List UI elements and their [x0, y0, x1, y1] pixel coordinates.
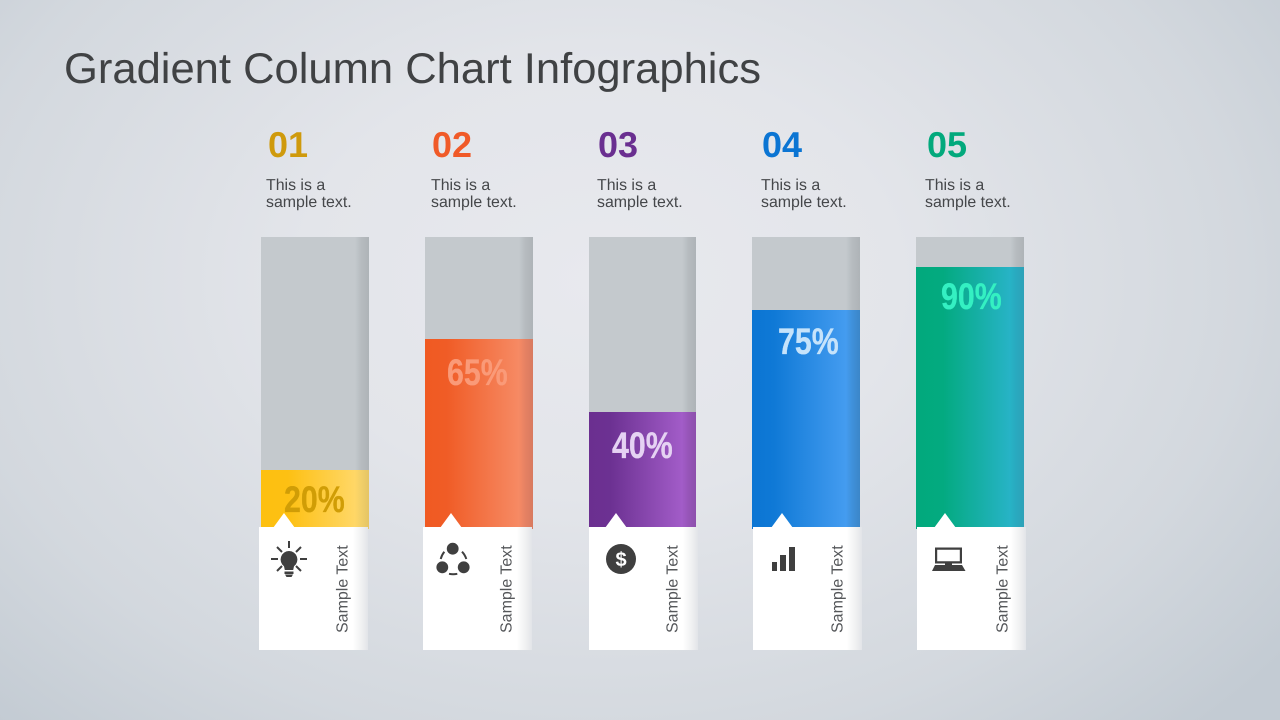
pointer 4 [771, 513, 793, 528]
label 5: Sample Text [994, 545, 1012, 633]
fill bar 75% [752, 310, 860, 529]
column 3 [589, 124, 698, 650]
percent 20%: 20% [284, 479, 345, 520]
percent 65%: 65% [447, 352, 508, 393]
description 5: This is a [925, 177, 984, 194]
description 1: sample text. [266, 194, 352, 211]
icon: light bulb [271, 541, 307, 577]
card 2 [423, 527, 532, 650]
card 5 [917, 527, 1026, 650]
icon: dollar coin [606, 544, 636, 574]
track 3 [589, 237, 696, 527]
column 4 [752, 124, 862, 650]
label 4: Sample Text [830, 545, 846, 633]
title: Gradient Column Chart Infographics [64, 45, 761, 93]
description 4: sample text. [761, 194, 847, 211]
label 1: Sample Text [334, 545, 352, 633]
number 05: 05 [927, 124, 967, 165]
column 1 [259, 124, 369, 650]
description 5: sample text. [925, 194, 1011, 211]
fill bar 40% [589, 412, 696, 527]
pointer 3 [605, 513, 627, 528]
fill bar 20% [261, 470, 369, 529]
pointer 5 [934, 513, 956, 528]
pointer 1 [273, 513, 295, 528]
number 02: 02 [432, 124, 472, 165]
icon: bar chart [772, 547, 795, 571]
pointer 2 [440, 513, 462, 528]
description 4: This is a [761, 177, 820, 194]
icon: three connected circles [436, 543, 470, 574]
fill bar 65% [425, 339, 533, 529]
fill bar 90% [916, 267, 1024, 529]
track 2 [425, 237, 533, 527]
column 5 [916, 124, 1026, 650]
label 2: Sample Text [498, 545, 516, 633]
number 01: 01 [268, 124, 308, 165]
track 5 [916, 237, 1024, 527]
number 03: 03 [598, 124, 638, 165]
card 4 [753, 527, 862, 650]
number 04: 04 [762, 124, 802, 165]
percent 40%: 40% [612, 425, 673, 466]
track 1 [261, 237, 369, 527]
description 1: This is a [266, 177, 325, 194]
percent 75%: 75% [778, 321, 839, 362]
icon: dollar coin: $ [615, 549, 627, 571]
card 1 [259, 527, 368, 650]
description 3: sample text. [597, 194, 683, 211]
column 2 [423, 124, 533, 650]
label 3: Sample Text [664, 545, 682, 633]
card 3 [589, 527, 698, 650]
description 3: This is a [597, 177, 656, 194]
icon: laptop [932, 548, 966, 571]
description 2: This is a [431, 177, 490, 194]
description 2: sample text. [431, 194, 517, 211]
percent 90%: 90% [941, 276, 1002, 317]
track 4 [752, 237, 860, 527]
